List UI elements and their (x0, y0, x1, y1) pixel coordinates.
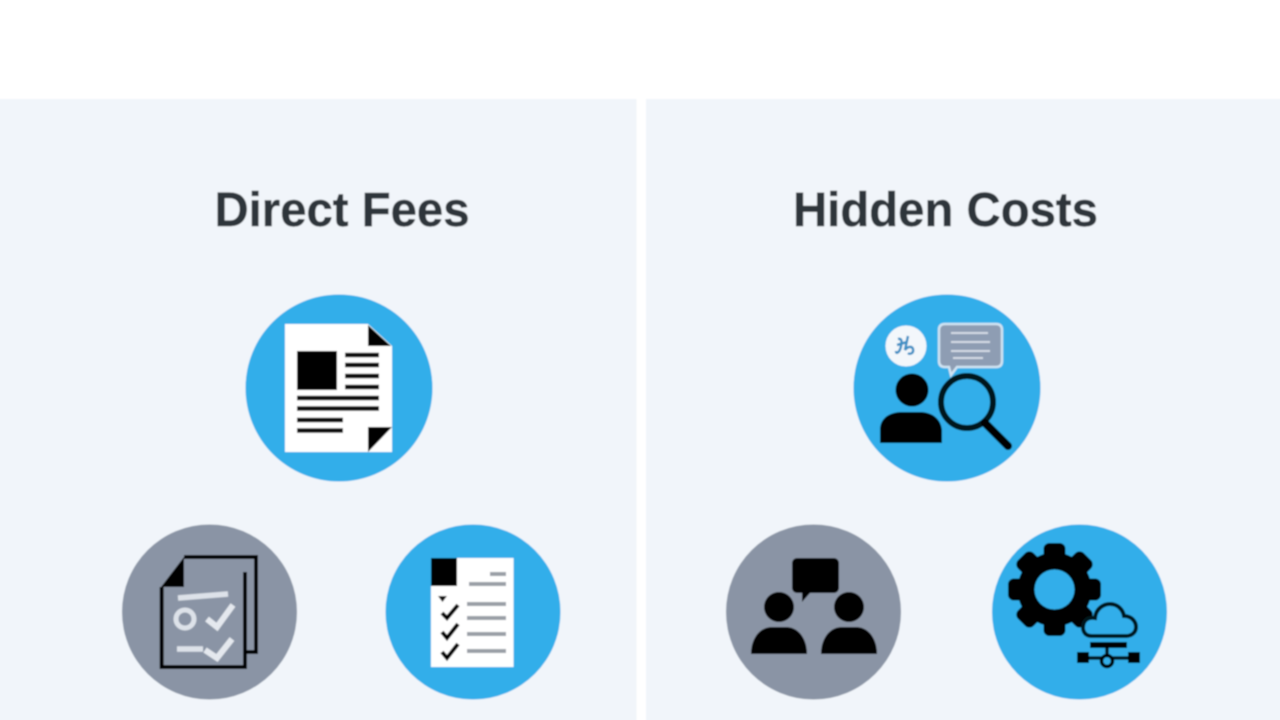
panel: direct fees (0, 99, 636, 720)
heading: hidden costs: Hidden Costs (793, 184, 1098, 237)
icon: checklist (386, 524, 560, 700)
icon: compliance papers with checks (122, 524, 297, 700)
icon: document with image and text (246, 294, 432, 482)
heading: direct fees: Direct Fees (214, 184, 470, 237)
icon: person research with magnifier (854, 294, 1040, 482)
panel: hidden costs (646, 99, 1280, 720)
icon: two people talking (726, 524, 901, 700)
icon: gear and cloud network (992, 524, 1167, 700)
